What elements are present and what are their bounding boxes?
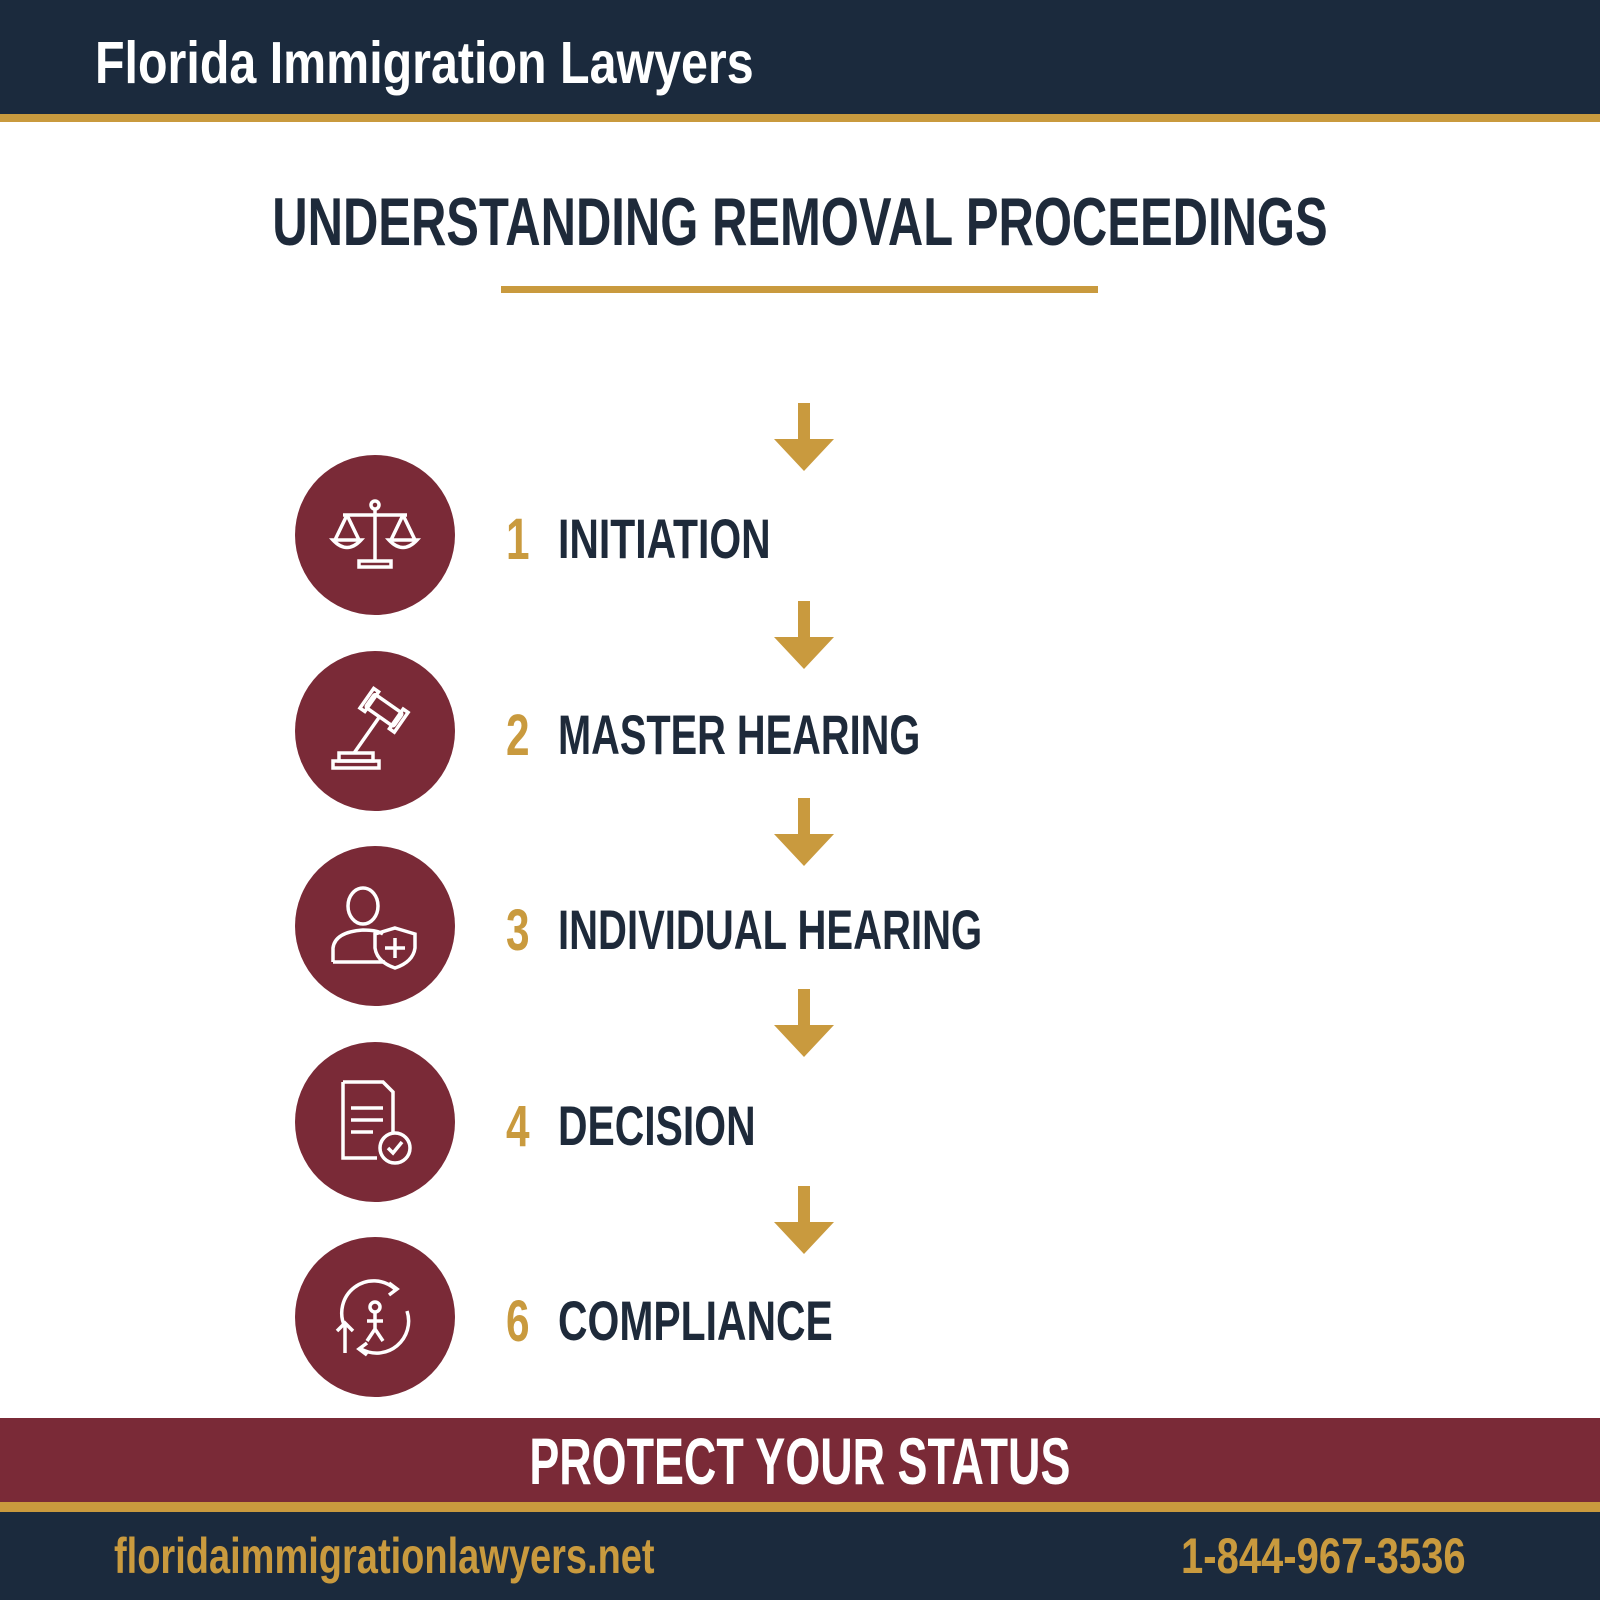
text: INITIATION	[558, 507, 771, 570]
header bar	[0, 0, 1600, 122]
step 4 label	[506, 1094, 756, 1159]
footer	[0, 1512, 1600, 1600]
step 6 label	[506, 1289, 833, 1354]
text: MASTER HEARING	[558, 703, 920, 766]
website: floridaimmigrationlawyers.net	[114, 1528, 655, 1584]
arrow 1	[774, 403, 834, 471]
step 3 label	[506, 898, 982, 963]
step 2 icon: gavel	[295, 651, 455, 811]
step 2 label	[506, 703, 920, 768]
main title: UNDERSTANDING REMOVAL PROCEEDINGS	[272, 184, 1328, 260]
text: COMPLIANCE	[558, 1289, 833, 1352]
arrow 5	[774, 1186, 834, 1254]
text: DECISION	[558, 1094, 756, 1157]
arrow 3	[774, 798, 834, 866]
text: 4	[506, 1094, 530, 1159]
text: 2	[506, 703, 530, 768]
text: INDIVIDUAL HEARING	[558, 898, 982, 961]
call to action banner	[0, 1418, 1600, 1512]
header title: Florida Immigration Lawyers	[95, 30, 754, 96]
title underline	[501, 286, 1098, 293]
step 6 icon: cycle arrows with person	[295, 1237, 455, 1397]
step 4 icon: document with check	[295, 1042, 455, 1202]
phone: 1-844-967-3536	[1181, 1528, 1466, 1584]
arrow 2	[774, 601, 834, 669]
arrow 4	[774, 989, 834, 1057]
text: 3	[506, 898, 530, 963]
text: 6	[506, 1289, 530, 1354]
step 1 label	[506, 507, 771, 572]
step 1 icon: scales	[295, 455, 455, 615]
step 3 icon: person with shield	[295, 846, 455, 1006]
text: 1	[506, 507, 530, 572]
banner text: PROTECT YOUR STATUS	[529, 1424, 1071, 1498]
